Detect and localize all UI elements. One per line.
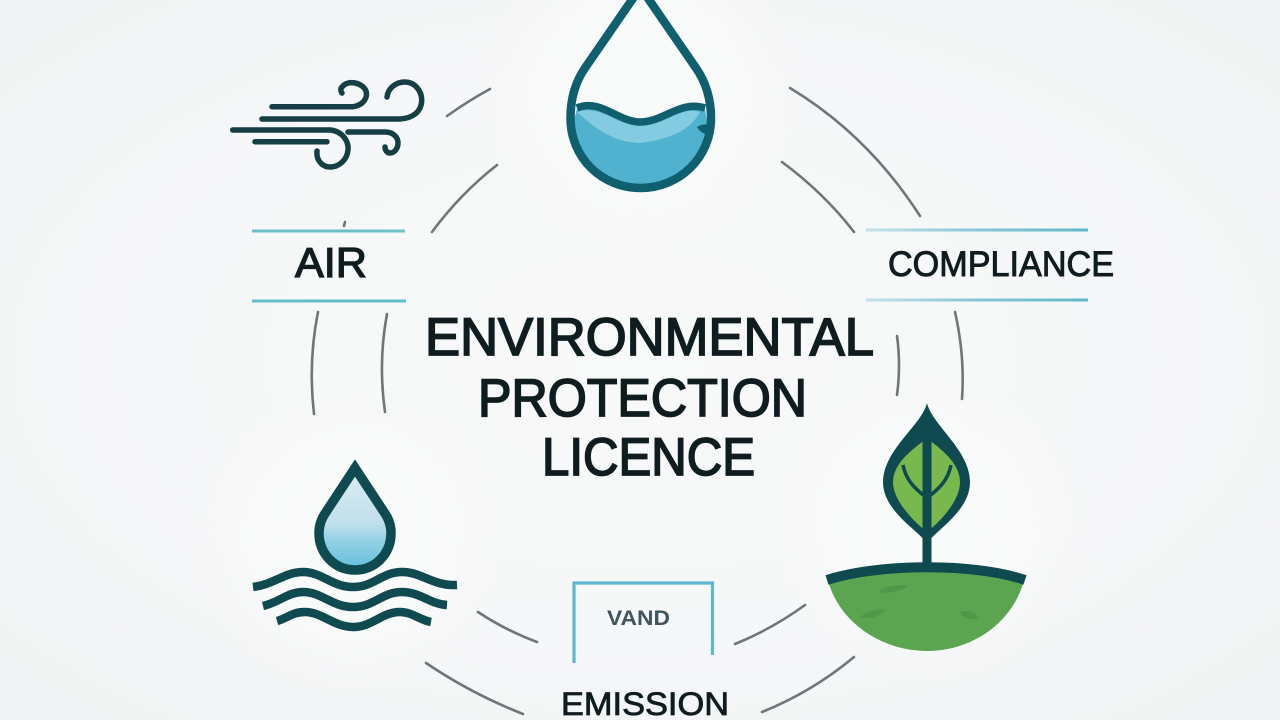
ring arc segments [312, 88, 963, 714]
label: COMPLIANCE [866, 228, 1114, 302]
icon: large water drop [570, 0, 711, 188]
title: LICENCE [542, 428, 755, 487]
label: AIR: AIR [295, 239, 367, 286]
title: PROTECTION [478, 369, 807, 428]
box: VAND [574, 583, 712, 663]
title: ENVIRONMENTAL [425, 308, 874, 367]
icon: wind [233, 82, 422, 167]
icon: water drop over waves [253, 468, 457, 627]
box: VAND: VAND [607, 607, 670, 630]
label: COMPLIANCE: COMPLIANCE [888, 245, 1114, 284]
title [425, 308, 874, 487]
icon: leaf and soil [827, 403, 1025, 651]
label: AIR [252, 230, 406, 302]
